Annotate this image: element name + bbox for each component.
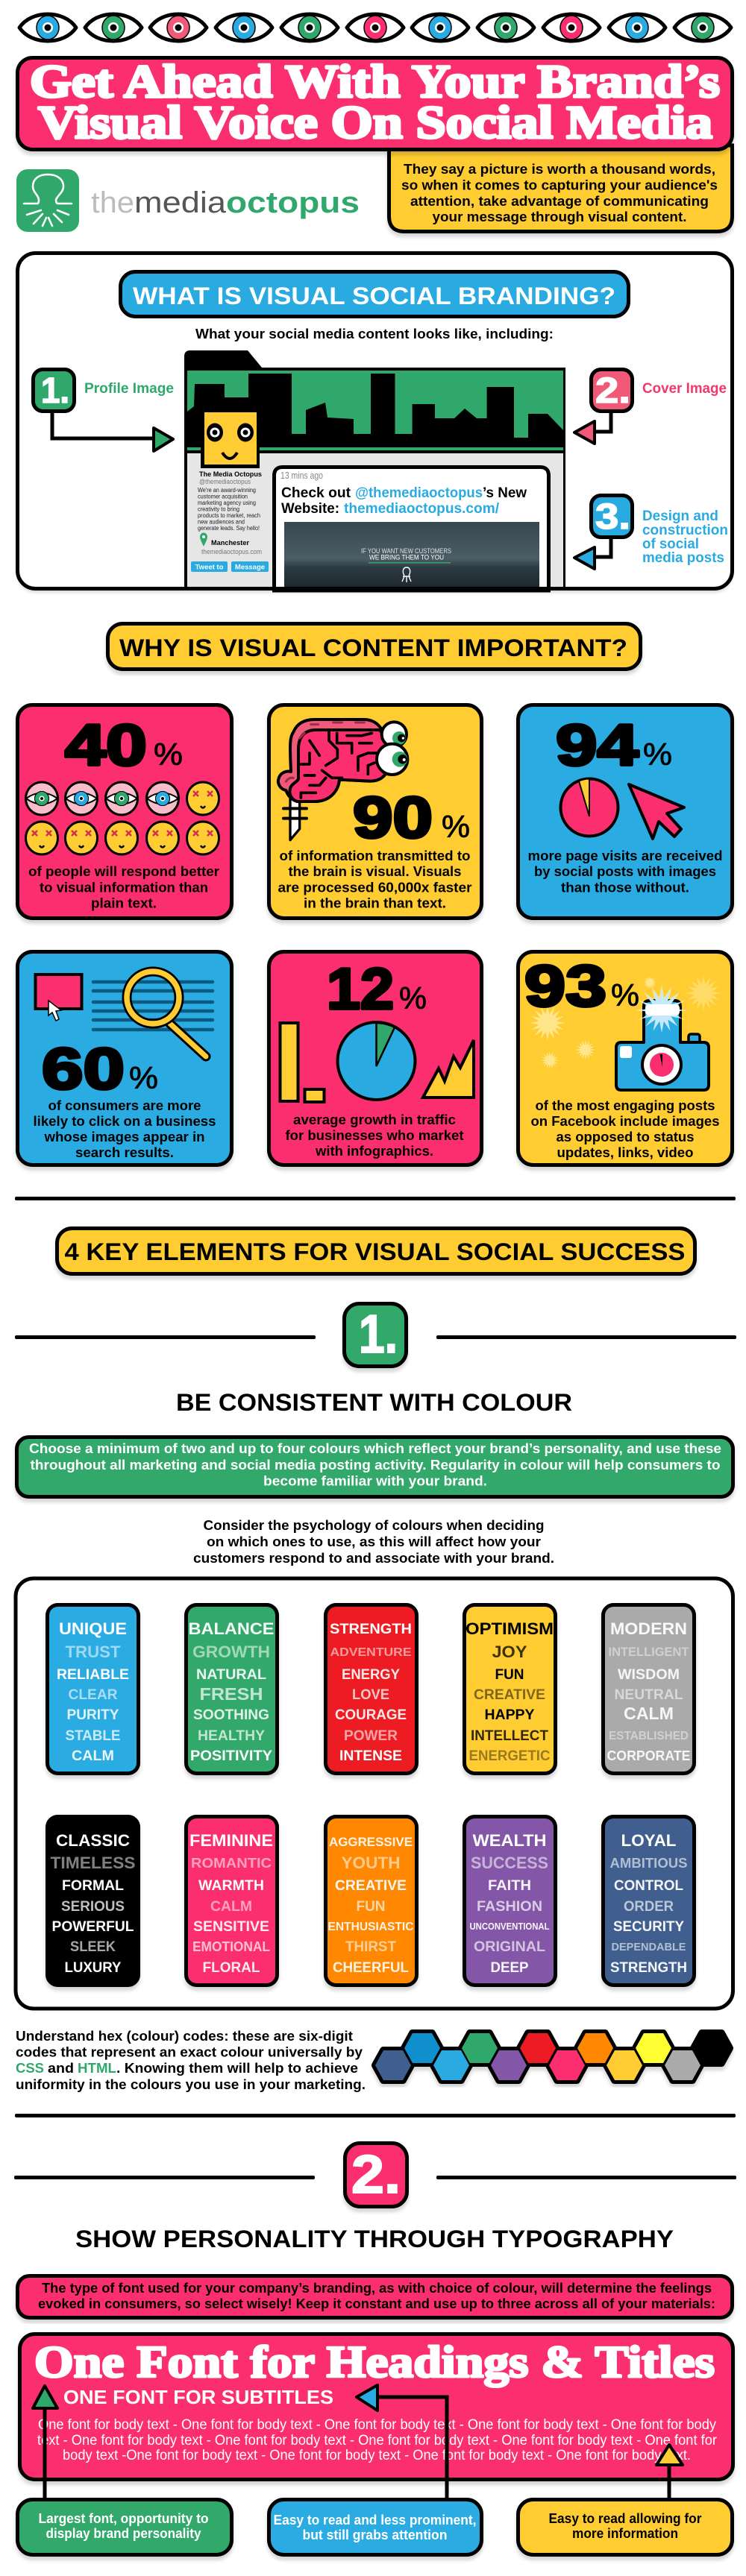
stat card: 40%: 40	[65, 712, 147, 778]
tile: blue: TRUST	[66, 1643, 121, 1661]
stat card: 60%	[18, 951, 231, 1165]
panel: font hierarchy example	[19, 2334, 733, 2480]
tile: red: POWER	[344, 1728, 398, 1744]
row of watching eyes	[19, 14, 731, 41]
tile: yellow: ENERGETIC	[468, 1748, 551, 1764]
panel: font hierarchy example: text - One font for body text - One font for body text - One font for body text - One font for body text - One font for	[37, 2433, 718, 2449]
text: hex codes: CSS	[16, 2060, 44, 2076]
callout 3: design of posts: 3.	[595, 497, 630, 537]
tile: navy: DEPENDABLE	[612, 1941, 686, 1953]
tile: green: SOOTHING	[193, 1707, 269, 1723]
stat card: 90%: %	[442, 809, 470, 844]
profile details: generate leads. Say hello!	[198, 525, 260, 532]
tile: green: GROWTH	[192, 1643, 270, 1661]
post card: 13 mins ago	[280, 470, 323, 481]
stat card: 93%: updates, links, video	[557, 1144, 694, 1160]
profile details: Tweet to	[195, 564, 224, 571]
text: hex codes	[16, 2028, 366, 2092]
subheading: What your social media content looks like, including:	[195, 326, 554, 341]
profile details: products to market, reach	[198, 512, 260, 519]
panel: colour psychology tiles	[16, 1578, 733, 2009]
icon: bars	[280, 1023, 324, 1102]
tile: purple: FAITH	[488, 1878, 531, 1894]
tile: navy: ORDER	[624, 1899, 674, 1915]
post card: Website:	[281, 501, 339, 517]
heading: 4 key elements	[57, 1229, 695, 1273]
callout 2: cover image: Cover Image	[642, 381, 727, 397]
label: largest font	[18, 2499, 231, 2554]
website screenshot: IF YOU WANT NEW CUSTOMERS	[361, 547, 451, 555]
tile: grey: ESTABLISHED	[609, 1730, 689, 1742]
tile: navy: AMBITIOUS	[610, 1856, 688, 1871]
tile: navy: CONTROL	[614, 1878, 683, 1894]
profile details	[191, 470, 269, 572]
tile: pink	[186, 1816, 278, 1985]
tile: purple: SUCCESS	[471, 1854, 548, 1872]
tile: red: COURAGE	[335, 1707, 407, 1723]
tile: orange: THIRST	[345, 1939, 396, 1955]
tile: purple	[464, 1816, 555, 1985]
tile: green: NATURAL	[196, 1667, 266, 1683]
tile: grey: CORPORATE	[607, 1748, 691, 1763]
icon: pie chart	[337, 1022, 415, 1100]
callout 2: cover image	[574, 370, 727, 444]
intro callout	[389, 145, 733, 231]
number badge 1	[345, 1303, 406, 1366]
text: hex codes: HTML	[78, 2060, 116, 2076]
tile: blue: UNIQUE	[59, 1619, 127, 1638]
heading: what is visual social branding: WHAT IS VISUAL SOCIAL BRANDING?	[133, 283, 615, 309]
profile details: new audiences and	[198, 519, 245, 525]
profile details: The Media Octopus	[199, 470, 262, 479]
tile: orange: CHEERFUL	[333, 1960, 409, 1976]
tile: orange: FUN	[357, 1899, 385, 1915]
title: Get Ahead With Your Brand’s	[30, 57, 720, 107]
heading: why is visual content important: WHY IS VISUAL CONTENT IMPORTANT?	[119, 634, 627, 661]
stat card: 12%	[269, 951, 482, 1165]
tile: grey: NEUTRAL	[615, 1687, 683, 1703]
tile: black	[48, 1816, 139, 1985]
panel: typography advice	[18, 2276, 733, 2317]
text: hex codes: codes that represent an exact colour universally by	[16, 2044, 363, 2059]
logo: the media octopus	[16, 169, 360, 232]
label: easy to read, less prominent: Easy to read and less prominent,	[273, 2512, 476, 2528]
profile details: Manchester	[211, 539, 249, 547]
text: psychology of colours	[193, 1517, 554, 1566]
tile: yellow: HAPPY	[485, 1707, 535, 1723]
stat card: 93%: %	[611, 977, 639, 1013]
tile: yellow: JOY	[492, 1643, 527, 1661]
stat card: 94%: more page visits are received	[528, 848, 722, 863]
tile: red: ENERGY	[342, 1667, 400, 1683]
post card: themediaoctopus.com/	[344, 501, 500, 517]
tile: pink: SENSITIVE	[193, 1919, 269, 1935]
stat card: 93%: on Facebook include images	[531, 1113, 719, 1129]
icon: pie chart	[561, 778, 618, 837]
text: hex codes: Understand hex (colour) codes: these are six-digit	[16, 2028, 353, 2044]
label: more information: Easy to read allowing for	[549, 2510, 701, 2526]
callout 1: profile image: 1.	[41, 371, 69, 411]
panel: colour advice: become familiar with your brand.	[263, 1473, 487, 1488]
tile: black: LUXURY	[64, 1960, 122, 1976]
tile: yellow	[464, 1605, 555, 1773]
profile details: marketing agency using	[198, 500, 256, 506]
tile: orange: ENTHUSIASTIC	[328, 1921, 414, 1933]
panel: font hierarchy example: body text -One font for body text - One font for body text - One font for body text - One font for body text.	[63, 2448, 691, 2463]
panel border	[18, 253, 733, 589]
stat card: 90%: of information transmitted to	[279, 848, 470, 863]
cover image skyline	[187, 374, 563, 447]
text: psychology of colours: customers respond to and associate with your brand.	[193, 1550, 554, 1566]
tile: blue: RELIABLE	[57, 1667, 129, 1683]
tile: pink: WARMTH	[198, 1878, 264, 1894]
post card: Check out	[281, 485, 351, 501]
icon: brain with eyes	[278, 719, 407, 840]
stat card: 90%	[269, 705, 482, 919]
label: easy to read, less prominent	[269, 2499, 482, 2554]
heading: why is visual content important	[107, 623, 640, 670]
panel: typography advice: evoked in consumers, so select wisely! Keep it constant and use up to three across all of your materials:	[38, 2296, 715, 2311]
tile: purple: FASHION	[477, 1899, 542, 1915]
stat card: 60%: %	[129, 1060, 158, 1095]
panel: font hierarchy example: One font for body text - One font for body text - One font for body text - One font for body text - One font for body	[38, 2417, 716, 2433]
tile: blue: CLEAR	[69, 1687, 118, 1703]
icon: camera	[616, 988, 709, 1090]
tile: blue: PURITY	[67, 1707, 119, 1723]
tile: blue: STABLE	[66, 1728, 121, 1744]
stat card: 40%: of people will respond better	[28, 863, 219, 879]
tile: red: STRENGTH	[330, 1622, 412, 1637]
tile: grey: WISDOM	[618, 1667, 680, 1683]
callout 1: profile image: Profile Image	[84, 381, 174, 397]
stat card: 93%: of the most engaging posts	[536, 1098, 715, 1113]
stat card: 94%: 94	[556, 712, 639, 778]
stat card: 60%: whose images appear in	[43, 1129, 205, 1144]
profile details: @themediaoctopus	[199, 478, 251, 485]
callout 1: profile image	[33, 370, 174, 451]
panel: font hierarchy example: One Font for Headings & Titles	[34, 2337, 715, 2387]
tile: purple: ORIGINAL	[474, 1939, 545, 1955]
number badge 2	[345, 2143, 407, 2207]
stat card: 40%: to visual information than	[40, 880, 208, 895]
stat card: 90%: 90	[353, 784, 433, 850]
tile: green: FRESH	[200, 1684, 263, 1704]
tile: black: SLEEK	[70, 1939, 116, 1955]
stat card: 12%: average growth in traffic	[293, 1112, 456, 1127]
title	[18, 57, 733, 149]
tile: purple: UNCONVENTIONAL	[470, 1921, 550, 1932]
tile: red	[325, 1605, 416, 1773]
tile: purple: DEEP	[491, 1960, 529, 1976]
callout 3: design of posts: Design and	[642, 508, 718, 524]
intro callout: attention, take advantage of communicating	[410, 193, 709, 209]
callout 3: design of posts	[574, 495, 728, 569]
tile: blue	[48, 1605, 139, 1773]
stat card: 90%: in the brain than text.	[304, 895, 446, 911]
stat card: 94%: than those without.	[561, 880, 689, 895]
panel: font hierarchy example: ONE FONT FOR SUBTITLES	[63, 2386, 333, 2408]
stat card: 94%: by social posts with images	[534, 863, 716, 879]
callout 3: design of posts: construction	[642, 523, 728, 538]
text: hex codes: . Knowing them will help to achieve	[116, 2060, 358, 2076]
tile: grey: INTELLIGENT	[609, 1645, 689, 1659]
heading: 4 key elements: 4 KEY ELEMENTS FOR VISUAL SOCIAL SUCCESS	[64, 1238, 685, 1265]
tile: navy: LOYAL	[621, 1831, 676, 1850]
stat card: 93%: as opposed to status	[557, 1129, 694, 1144]
stat card: 60%: likely to click on a business	[33, 1113, 216, 1129]
stat card: 93%	[518, 951, 733, 1165]
text: hex codes: uniformity in the colours you use in your marketing.	[16, 2076, 366, 2092]
stat card: 12%: with infographics.	[315, 1143, 433, 1159]
heading: be consistent with colour: BE CONSISTENT WITH COLOUR	[176, 1389, 572, 1416]
profile details: customer acquisition	[198, 494, 248, 500]
stat card: 12%: %	[399, 980, 427, 1015]
stat card: 60%: 60	[42, 1036, 125, 1101]
label: largest font: display brand personality	[46, 2525, 201, 2541]
tile: black: POWERFUL	[52, 1919, 134, 1935]
tile: orange: CREATIVE	[335, 1878, 407, 1894]
number badge 2: 2.	[351, 2145, 401, 2205]
number badge 1: 1.	[359, 1305, 398, 1364]
tile: red: LOVE	[352, 1687, 389, 1703]
profile details: We're an award-winning	[198, 487, 256, 494]
stat card: 60%: search results.	[75, 1144, 174, 1160]
stat card: 94%	[518, 705, 733, 919]
tile: red: INTENSE	[339, 1748, 402, 1764]
logo: the media octopus: octopus	[226, 186, 360, 219]
stat card: 12%: 12	[327, 956, 394, 1021]
profile details: Message	[235, 564, 265, 571]
stat card: 90%: are processed 60,000x faster	[278, 880, 471, 895]
profile details: themediaoctopus.com	[201, 548, 262, 555]
tile: black: CLASSIC	[56, 1831, 130, 1850]
intro callout: They say a picture is worth a thousand words,	[404, 161, 715, 177]
tile: black: SERIOUS	[61, 1899, 125, 1915]
tile: grey	[603, 1605, 694, 1773]
tile: green: HEALTHY	[198, 1728, 265, 1744]
icon: search results with magnifier	[36, 971, 213, 1056]
tile: orange: YOUTH	[342, 1854, 400, 1872]
stat card: 40%: %	[154, 737, 183, 772]
logo: the media octopus: media	[134, 186, 227, 219]
arrow: blue to subtitle	[357, 2385, 447, 2498]
logo: the media octopus: the	[91, 186, 134, 219]
tile: pink: ROMANTIC	[191, 1856, 272, 1871]
arrow: green to heading	[33, 2386, 57, 2498]
stat card: 40%	[18, 705, 231, 919]
callout 3: design of posts: of social	[642, 537, 699, 552]
stat card: 12%: for businesses who market	[285, 1127, 464, 1143]
icon: growth mountain	[423, 1040, 474, 1098]
tile: purple: WEALTH	[473, 1831, 546, 1850]
tile: yellow: OPTIMISM	[466, 1619, 554, 1638]
tile: navy: STRENGTH	[610, 1960, 687, 1976]
tile: green: BALANCE	[188, 1619, 275, 1638]
tile: yellow: CREATIVE	[474, 1687, 545, 1703]
stat card: 94%: %	[643, 737, 672, 772]
tile: orange	[325, 1816, 416, 1985]
tile: black: FORMAL	[62, 1878, 124, 1894]
tile: navy	[603, 1816, 694, 1985]
icon: eyes and faces	[25, 782, 219, 854]
profile details: creativity to bring	[198, 506, 239, 513]
stat card: 90%: the brain is visual. Visuals	[288, 863, 461, 879]
callout 2: cover image: 2.	[595, 371, 630, 411]
tile: grey: MODERN	[610, 1619, 687, 1638]
tile: red: ADVENTURE	[330, 1646, 412, 1659]
panel: colour advice	[16, 1437, 733, 1497]
post card: ’s New	[483, 485, 527, 501]
tile: pink: EMOTIONAL	[192, 1939, 270, 1954]
sparkles	[530, 975, 721, 1069]
callout 3: design of posts: media posts	[642, 550, 724, 566]
stat card: 60%: of consumers are more	[48, 1098, 201, 1113]
arrow: yellow to body text	[656, 2445, 683, 2498]
label: easy to read, less prominent: but still grabs attention	[303, 2527, 448, 2542]
tile: orange: AGGRESSIVE	[329, 1835, 413, 1849]
website screenshot: WE BRING THEM TO YOU	[369, 553, 444, 561]
text: psychology of colours: Consider the psychology of colours when deciding	[203, 1517, 545, 1533]
panel: typography advice: The type of font used for your company’s branding, as with choice of colour, will determine the feelings	[42, 2280, 712, 2296]
intro callout: your message through visual content.	[433, 209, 686, 224]
tile: yellow: INTELLECT	[471, 1728, 548, 1744]
tile: navy: SECURITY	[613, 1919, 684, 1935]
panel: colour advice: throughout all marketing and social media posting activity. Regularity in colour will help consumers to	[30, 1457, 721, 1473]
tile: pink: FEMININE	[189, 1831, 273, 1850]
stat card: 93%: 93	[524, 953, 606, 1018]
tile: green: POSITIVITY	[190, 1748, 272, 1764]
panel: colour advice: Choose a minimum of two and up to four colours which reflect your brand’s personality, and use these	[29, 1440, 721, 1456]
heading: what is visual social branding	[121, 271, 628, 316]
label: more information	[518, 2499, 733, 2554]
post card: @themediaoctopus	[355, 485, 483, 501]
icon: cursor arrow	[629, 784, 684, 839]
website screenshot	[284, 522, 539, 589]
post card	[275, 467, 549, 591]
hexagon colour swatches	[375, 2033, 730, 2080]
social media page mock-up	[184, 350, 565, 591]
text: psychology of colours: on which ones to use, as this will affect how your	[207, 1534, 541, 1549]
profile image face	[201, 412, 260, 468]
title: Visual Voice On Social Media	[38, 98, 712, 148]
tile: pink: FLORAL	[203, 1960, 260, 1976]
tile: black: TIMELESS	[51, 1854, 136, 1872]
heading: show personality through typography: SHOW PERSONALITY THROUGH TYPOGRAPHY	[75, 2226, 674, 2252]
intro callout: so when it comes to capturing your audience's	[401, 177, 718, 192]
tile: grey: CALM	[624, 1704, 674, 1723]
tile: blue: CALM	[72, 1748, 114, 1764]
label: more information: more information	[572, 2525, 678, 2541]
tile: yellow: FUN	[495, 1667, 524, 1683]
text: hex codes: and	[48, 2060, 74, 2076]
tile: pink: CALM	[210, 1899, 252, 1915]
label: largest font: Largest font, opportunity to	[39, 2510, 209, 2526]
stat card: 40%: plain text.	[91, 895, 157, 911]
tile: green	[186, 1605, 278, 1773]
